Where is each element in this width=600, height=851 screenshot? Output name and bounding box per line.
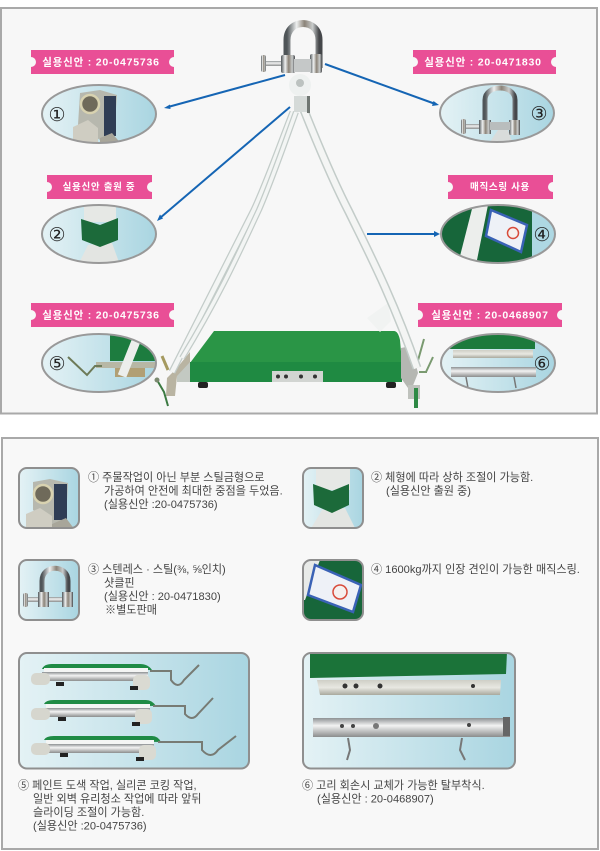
- upper rail: [317, 680, 501, 695]
- turf slab: [310, 652, 507, 678]
- slider position 2: [31, 698, 213, 726]
- text: feature 2: [371, 470, 533, 498]
- label: utility model 6: [418, 303, 562, 327]
- product: right bracket and hook: [401, 339, 433, 408]
- text: feature 2: (실용신안 출원 중): [386, 484, 471, 498]
- detail ellipse 3: shackle: ③: [530, 103, 548, 125]
- text: feature 1: ① 주물작업이 아닌 부분 스틸금형으로: [88, 471, 265, 484]
- label: utility model 6: 실용신안 : 20-0468907: [431, 308, 549, 322]
- arrow: to detail 4: [367, 231, 440, 237]
- text: feature 3: ※별도판매: [105, 604, 157, 616]
- label: magic sling: 매직스링 사용: [470, 181, 530, 193]
- detail ellipse 3: shackle: [440, 84, 554, 145]
- text: feature 1: [88, 471, 283, 511]
- label: utility model 5: [31, 303, 174, 327]
- detail ellipse 4: sling tag: ④: [533, 224, 551, 246]
- photo 6: detachable rails: [303, 652, 515, 768]
- text: feature 4: ④ 1600kg까지 인장 견인이 가능한 매직스링.: [371, 563, 580, 576]
- text: feature 6: [302, 779, 485, 806]
- label: magic sling: [448, 175, 553, 199]
- product: sling straps: [172, 110, 417, 372]
- label: utility model 2: [47, 175, 152, 199]
- arrow: to detail 2: [157, 107, 290, 221]
- text: feature 6: (실용신안 : 20-0468907): [317, 792, 434, 806]
- photo 5: three slider positions: [19, 653, 249, 768]
- text: feature 3: 샷클핀: [104, 576, 135, 590]
- label: utility model 5: 실용신안 : 20-0475736: [42, 308, 160, 322]
- bottom panel: feature descriptions: [2, 438, 598, 849]
- text: feature 6: ⑥ 고리 회손시 교체가 가능한 탈부착식.: [302, 779, 485, 792]
- text: feature 5: [18, 779, 202, 832]
- thumbnail 2: strap clip: [303, 466, 363, 530]
- label: utility model 1: [31, 50, 174, 74]
- label: utility model 3: 실용신안 : 20-0471830: [424, 56, 542, 68]
- slider position 3: [31, 736, 236, 761]
- text: feature 3: [88, 563, 226, 616]
- arrow: to detail 3: [325, 64, 439, 106]
- detail ellipse 5: hook and slider: ⑤: [48, 353, 66, 375]
- detail ellipse 1: casting: ①: [48, 104, 66, 126]
- thumbnail 3: shackle: [19, 560, 79, 620]
- top panel: product overview: [1, 8, 597, 414]
- product: turf platform: [190, 331, 402, 388]
- text: feature 5: 일반 외벽 유리청소 작업에 따라 앞뒤: [33, 792, 202, 806]
- text: feature 5: 슬라이딩 조절이 가능함.: [33, 806, 144, 819]
- detail ellipse 1: casting: [42, 85, 156, 145]
- product: strap label tag: [367, 303, 391, 332]
- label: utility model 3: [413, 50, 556, 74]
- detail ellipse 4: sling tag: [440, 204, 556, 264]
- detail ellipse 6: detachable rails: [441, 334, 555, 392]
- text: feature 2: ② 체형에 따라 상하 조절이 가능함.: [371, 470, 533, 484]
- thumbnail 4: sling tag: [303, 560, 363, 620]
- text: feature 3: ③ 스텐레스 · 스틸(⅜, ⅝인치): [88, 563, 226, 576]
- text: feature 1: 가공하여 안전에 최대한 중점을 두었음.: [104, 484, 283, 498]
- text: feature 1: (실용신안 :20-0475736): [104, 498, 218, 511]
- detail ellipse 5: hook and slider: [42, 333, 160, 392]
- slider position 1: [31, 664, 199, 690]
- label: utility model 2: 실용신안 출원 중: [63, 181, 135, 193]
- lower rail: [313, 717, 510, 760]
- label: utility model 1: 실용신안 : 20-0475736: [42, 56, 160, 68]
- arrow: to detail 1: [164, 75, 285, 109]
- product: shackle: [261, 24, 322, 113]
- detail ellipse 2: strap clip: [42, 200, 156, 265]
- product: left bracket and hook: [154, 352, 190, 406]
- detail ellipse 6: detachable rails: ⑥: [533, 353, 551, 375]
- text: feature 5: ⑤ 페인트 도색 작업, 실리콘 코킹 작업,: [18, 779, 197, 792]
- thumbnail 1: casting: [19, 468, 79, 530]
- detail ellipse 2: strap clip: ②: [48, 224, 66, 246]
- text: feature 3: (실용신안 : 20-0471830): [104, 590, 221, 603]
- text: feature 5: (실용신안 :20-0475736): [33, 820, 147, 832]
